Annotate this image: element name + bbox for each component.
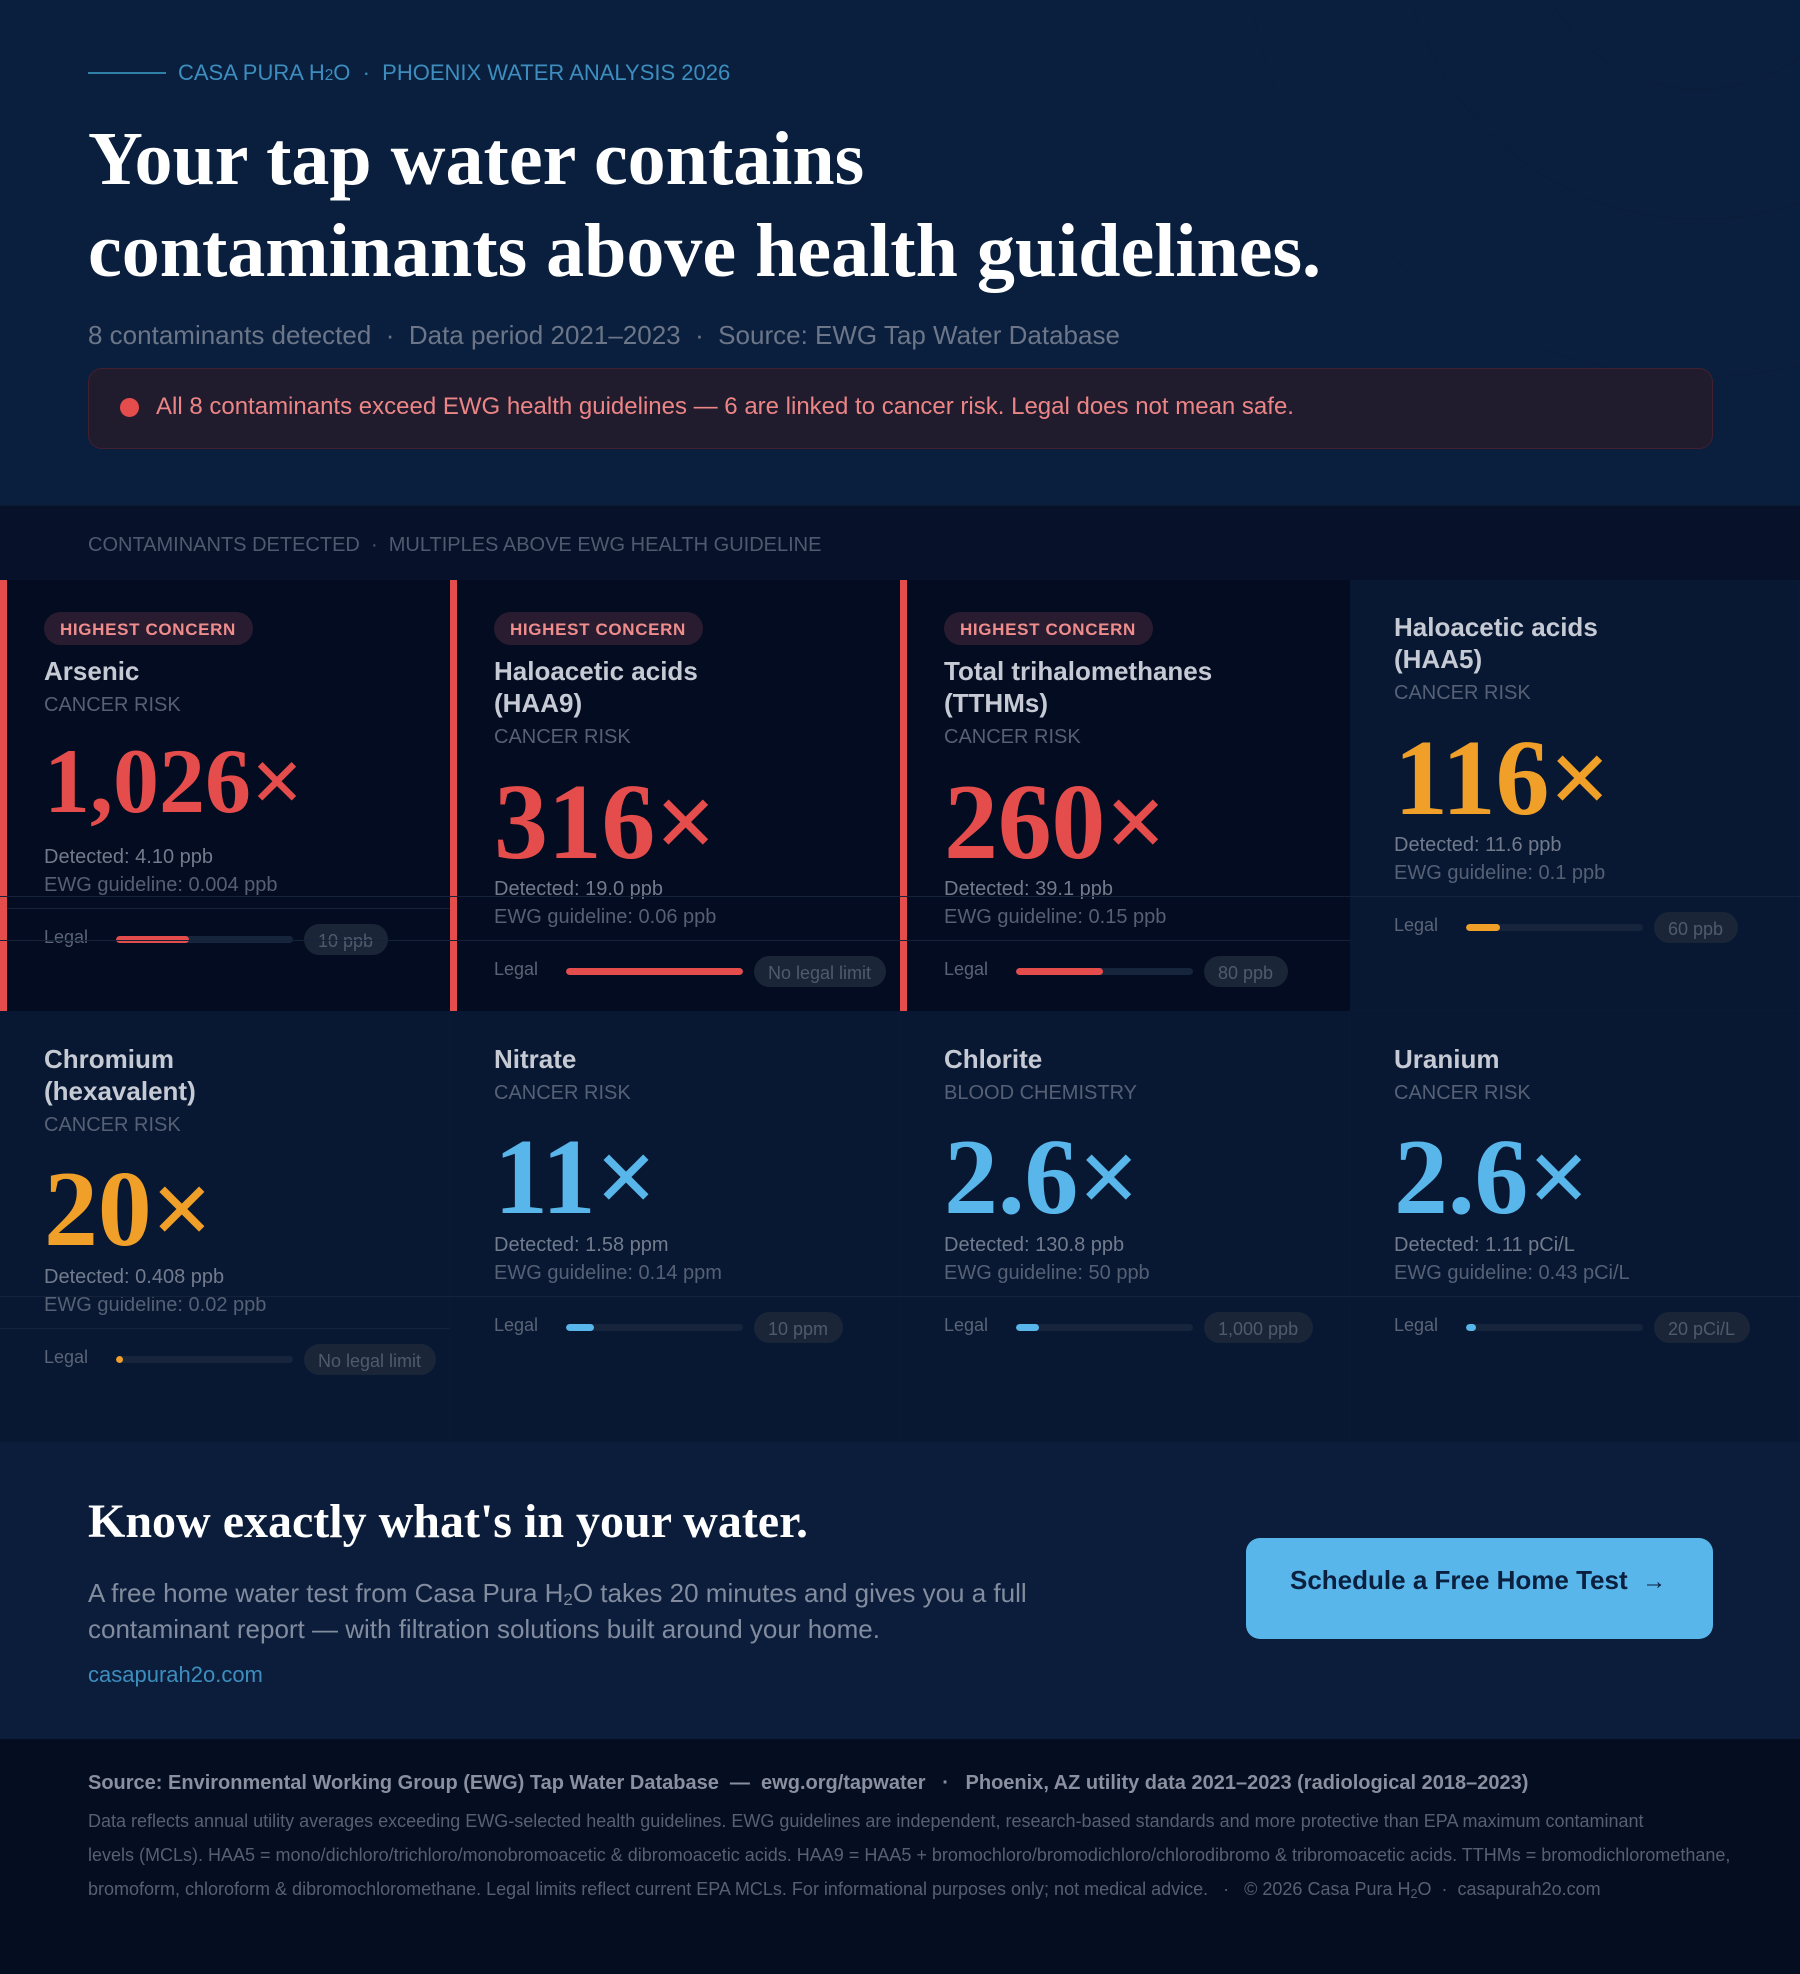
card: Chromium hexavalent [0, 1011, 450, 1442]
panel: hero header [0, 0, 1800, 505]
card: Uranium: Uranium [1394, 1044, 1499, 1074]
title: Your tap water contains [88, 117, 864, 201]
title [88, 117, 1321, 293]
card: Haloacetic acids HAA9: No legal limit [768, 963, 871, 983]
card: Haloacetic acids HAA5: Detected: 11.6 ppb [1394, 834, 1562, 856]
card: Uranium: EWG guideline: 0.43 pCi/L [1394, 1262, 1630, 1284]
card: Arsenic [0, 580, 450, 1011]
card: Total trihalomethanes: EWG guideline: 0.15 ppb [944, 906, 1166, 928]
card: Nitrate: EWG guideline: 0.14 ppm [494, 1262, 722, 1284]
card: Uranium: Legal [1394, 1315, 1438, 1335]
card: Nitrate: CANCER RISK [494, 1082, 631, 1104]
card: Total trihalomethanes: HIGHEST CONCERN [960, 620, 1136, 639]
card: Haloacetic acids HAA9: HIGHEST CONCERN [510, 620, 686, 639]
card: Chromium hexavalent: No legal limit [318, 1351, 421, 1371]
card: Total trihalomethanes: 260× [944, 763, 1166, 882]
card: Total trihalomethanes: (TTHMs) [944, 688, 1048, 718]
card: Chlorite: 1,000 ppb [1218, 1319, 1298, 1339]
card: Haloacetic acids HAA5: CANCER RISK [1394, 682, 1531, 704]
card: Arsenic: Legal [44, 927, 88, 947]
card: Uranium: 20 pCi/L [1668, 1319, 1735, 1339]
panel: footer sources [0, 1739, 1800, 1974]
card: Total trihalomethanes: Legal [944, 959, 988, 979]
section label band: CONTAMINANTS DETECTED · MULTIPLES ABOVE EWG HEALTH GUIDELINE [88, 534, 821, 556]
card: Nitrate [450, 1011, 900, 1442]
card: Haloacetic acids HAA5: EWG guideline: 0.1 ppb [1394, 862, 1605, 884]
alert banner [88, 368, 1713, 449]
card: Nitrate: Nitrate [494, 1044, 576, 1074]
card: Total trihalomethanes: 80 ppb [1218, 963, 1273, 983]
title: contaminants above health guidelines. [88, 209, 1321, 293]
CTA description: contaminant report — with filtration solutions built around your home. [88, 1614, 880, 1644]
subtitle meta line: 8 contaminants detected · Data period 2021–2023 · Source: EWG Tap Water Database [88, 320, 1120, 350]
CTA description: A free home water test from Casa Pura H2O takes 20 minutes and gives you a full [88, 1578, 1027, 1609]
card: Haloacetic acids HAA9: Haloacetic acids [494, 656, 698, 686]
card: Haloacetic acids HAA5: 116× [1394, 719, 1610, 838]
card: Uranium: Detected: 1.11 pCi/L [1394, 1234, 1575, 1256]
card: Chlorite: 2.6× [944, 1118, 1139, 1237]
card: Total trihalomethanes: Total trihalomethanes [944, 656, 1212, 686]
card: Chromium hexavalent: EWG guideline: 0.02 ppb [44, 1294, 266, 1316]
card: Haloacetic acids HAA9: 316× [494, 763, 716, 882]
CTA button [1246, 1538, 1713, 1639]
eyebrow label: CASA PURA H O · PHOENIX WATER ANALYSIS 2026 [178, 60, 730, 85]
card: Chlorite: Chlorite [944, 1044, 1042, 1074]
CTA description [88, 1578, 1027, 1644]
card: Chromium hexavalent: 20× [44, 1150, 213, 1269]
card: Haloacetic acids HAA5: (HAA5) [1394, 644, 1482, 674]
card: Chromium hexavalent: Detected: 0.408 ppb [44, 1266, 224, 1288]
card: Nitrate: Legal [494, 1315, 538, 1335]
card: Arsenic: Detected: 4.10 ppb [44, 846, 213, 868]
alert banner: All 8 contaminants exceed EWG health guidelines — 6 are linked to cancer risk. Legal does not mean safe. [156, 393, 1294, 420]
panel: call to action [0, 1442, 1800, 1739]
card: Chlorite: Legal [944, 1315, 988, 1335]
card: Haloacetic acids HAA5: 60 ppb [1668, 919, 1723, 939]
card: Haloacetic acids HAA9: Detected: 19.0 ppb [494, 878, 663, 900]
card: Haloacetic acids HAA5: Legal [1394, 915, 1438, 935]
card: Haloacetic acids HAA9: EWG guideline: 0.06 ppb [494, 906, 716, 928]
card: Arsenic: 10 ppb [318, 931, 373, 951]
card: Chromium hexavalent: (hexavalent) [44, 1076, 196, 1106]
section label band [0, 505, 1800, 580]
card: Haloacetic acids HAA9 [450, 580, 900, 1011]
card: Uranium: 2.6× [1394, 1118, 1589, 1237]
card: Chlorite: BLOOD CHEMISTRY [944, 1082, 1137, 1104]
card: Chlorite: Detected: 130.8 ppb [944, 1234, 1124, 1256]
CTA button: Schedule a Free Home Test → [1290, 1565, 1666, 1595]
card: Chromium hexavalent: Chromium [44, 1044, 174, 1074]
CTA website link: casapurah2o.com [88, 1662, 263, 1687]
card: Arsenic: CANCER RISK [44, 694, 181, 716]
CTA heading: Know exactly what's in your water. [88, 1495, 808, 1548]
card: Nitrate: Detected: 1.58 ppm [494, 1234, 669, 1256]
card: Haloacetic acids HAA5: Haloacetic acids [1394, 612, 1598, 642]
card: Chromium hexavalent: CANCER RISK [44, 1114, 181, 1136]
card: Total trihalomethanes: Detected: 39.1 ppb [944, 878, 1113, 900]
card: Chromium hexavalent: Legal [44, 1347, 88, 1367]
card: Arsenic: 1,026× [44, 730, 303, 832]
card: Arsenic: HIGHEST CONCERN [60, 620, 236, 639]
source line: Source: Environmental Working Group (EWG) Tap Water Database — ewg.org/tapwater · Phoenix, AZ utility data 2021–2023 (radiological 2018–2023) [88, 1772, 1528, 1794]
eyebrow label: 2 [325, 67, 333, 84]
card: Haloacetic acids HAA9: Legal [494, 959, 538, 979]
card: Arsenic: Arsenic [44, 656, 139, 686]
card: Total trihalomethanes [900, 580, 1350, 1011]
card: Haloacetic acids HAA5 [1350, 580, 1800, 1011]
card: Chlorite: EWG guideline: 50 ppb [944, 1262, 1150, 1284]
disclaimer text: Data reflects annual utility averages exceeding EWG-selected health guidelines. EWG guidelines are independent, research-based standards and more protective than EPA maximum contaminant levels (MCLs). HAA5 = mono/dichloro/trichloro/monobromoacetic & dibromoacetic acids. HAA9 = HAA5 + bromochloro/bromodichloro/chlorodibromo & tribromoacetic acids. TTHMs = bromodichloromethane, bromoform, chloroform & dibromochloromethane. Legal limits reflect current EPA MCLs. For informational purposes only; not medical advice. · © 2026 Casa Pura H2O · casapurah2o.com [88, 1811, 1730, 1901]
card: Haloacetic acids HAA9: CANCER RISK [494, 726, 631, 748]
card: Total trihalomethanes: CANCER RISK [944, 726, 1081, 748]
card: Uranium [1350, 1011, 1800, 1442]
card: Nitrate: 11× [494, 1118, 657, 1237]
card: Haloacetic acids HAA9: (HAA9) [494, 688, 582, 718]
card: Chlorite [900, 1011, 1350, 1442]
card: Nitrate: 10 ppm [768, 1319, 828, 1339]
card: Uranium: CANCER RISK [1394, 1082, 1531, 1104]
card: Arsenic: EWG guideline: 0.004 ppb [44, 874, 278, 896]
